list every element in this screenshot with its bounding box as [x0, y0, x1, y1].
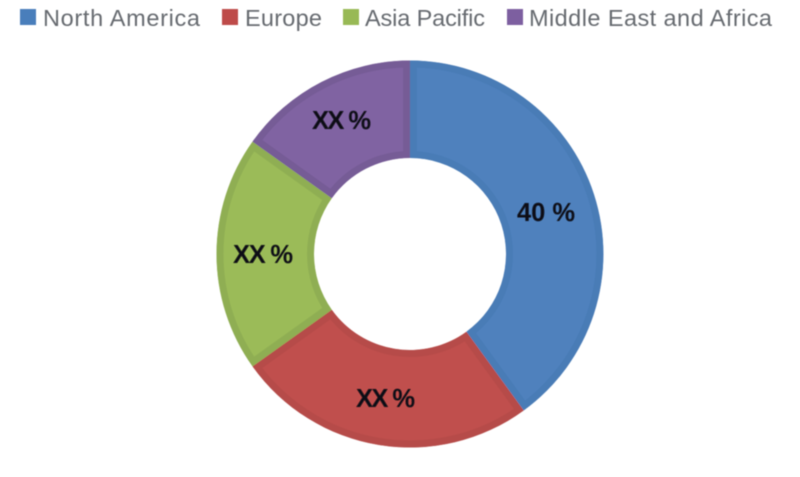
donut chart [217, 60, 603, 447]
segment: Middle East and Africa [252, 60, 410, 198]
segment: Europe [252, 310, 524, 447]
label: Asia Pacific value: XX % [233, 241, 293, 269]
label: Middle East and Africa value: XX % [312, 107, 371, 135]
label: North America value: 40 % [517, 199, 575, 227]
data labels [233, 107, 575, 413]
label: Europe value: XX % [356, 385, 415, 413]
legend item: Middle East and Africa: Middle East and Africa [529, 5, 773, 31]
legend [20, 5, 773, 31]
segment: Asia Pacific [217, 142, 332, 366]
legend item: North America: North America [43, 5, 201, 31]
legend item: Europe: Europe [245, 5, 322, 31]
legend item: Asia Pacific: Asia Pacific [365, 5, 485, 31]
segment: North America 40% [410, 60, 603, 410]
